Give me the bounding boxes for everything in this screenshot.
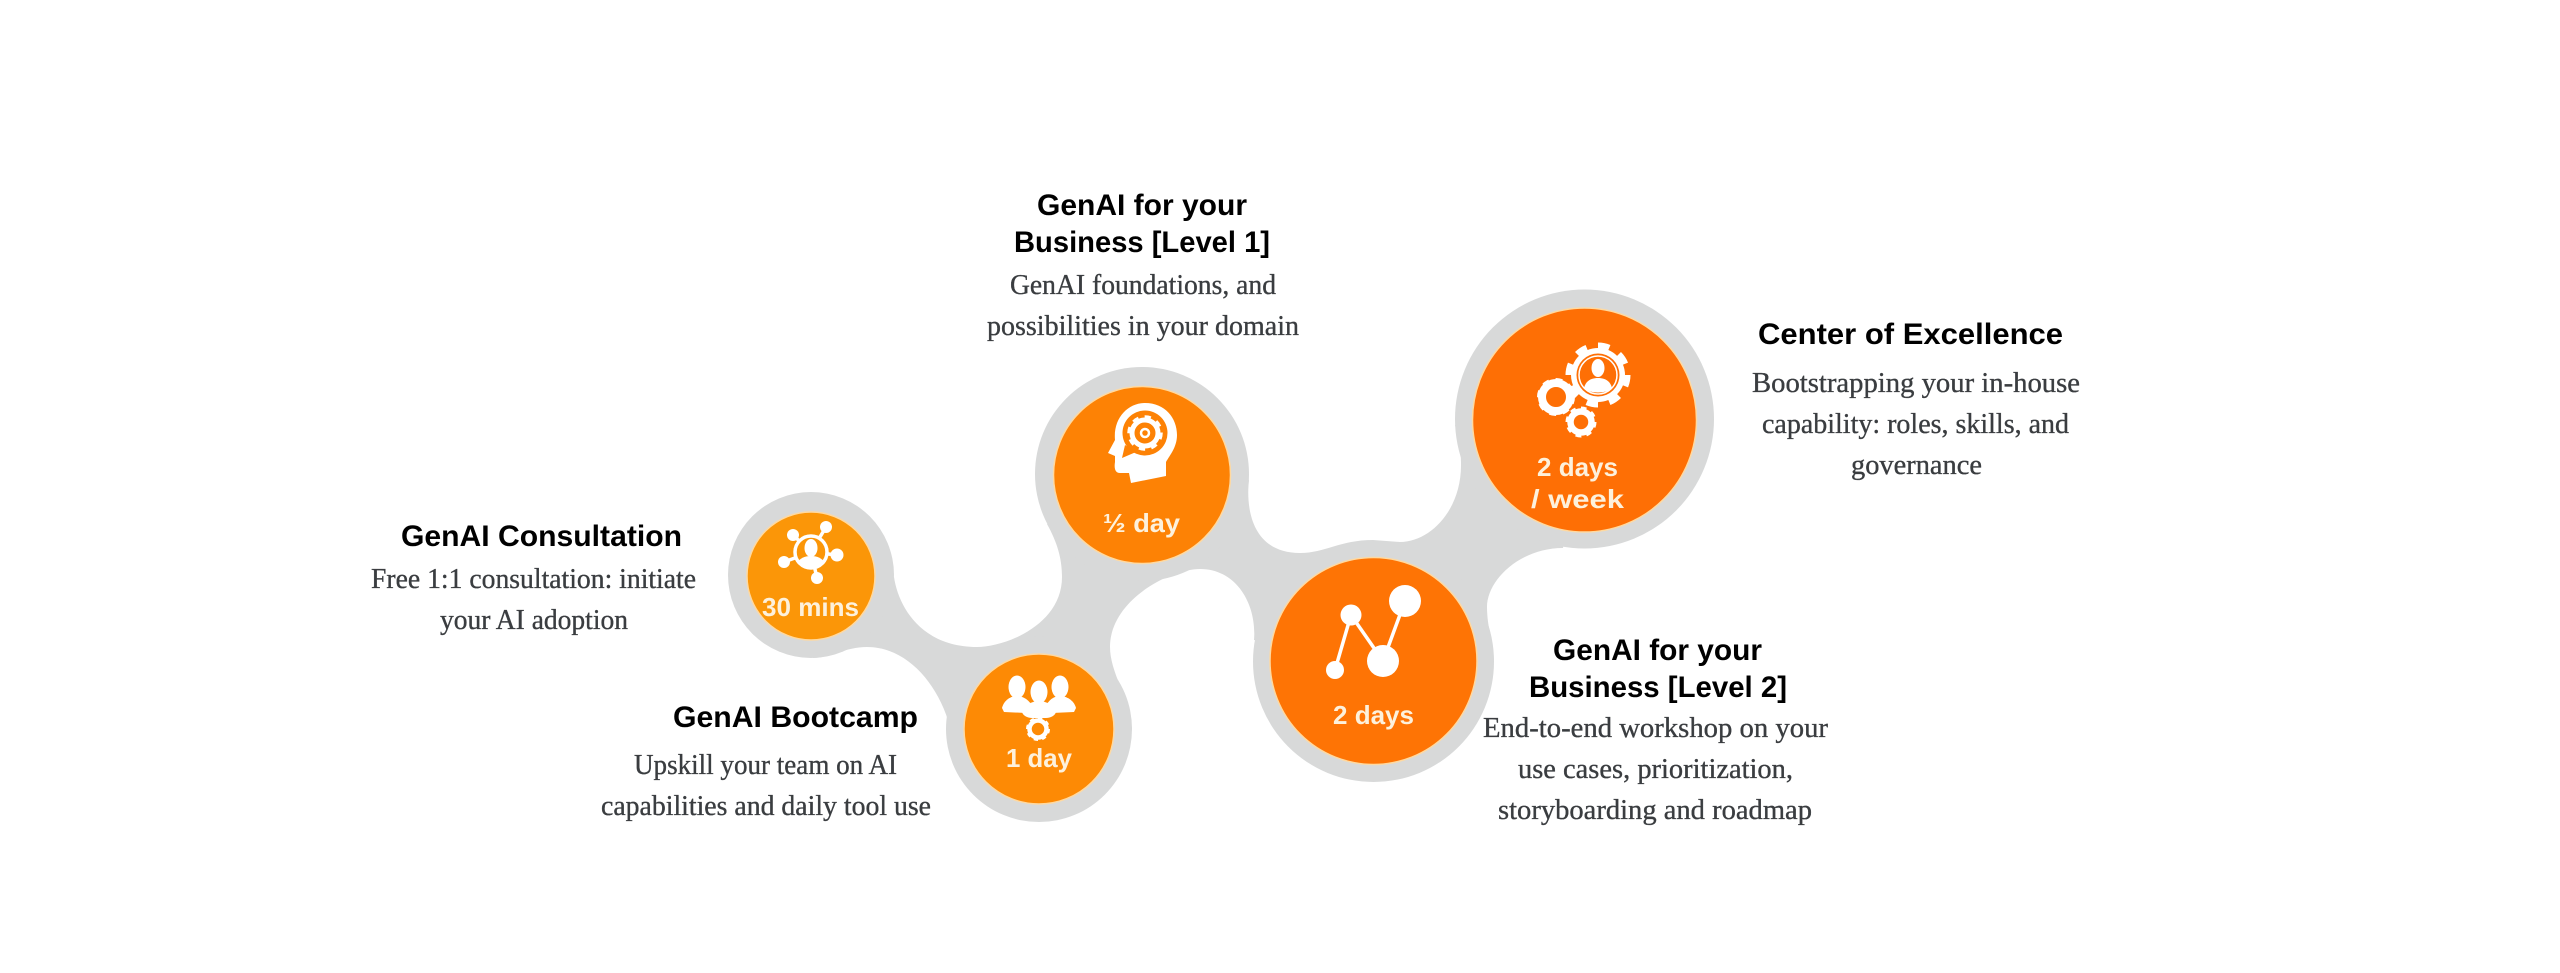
text block: Center of Excellence: capability: roles, skills, and	[1762, 408, 2069, 440]
step 2: 1 day badge	[964, 654, 1114, 804]
text block: GenAI Consultation: your AI adoption	[440, 604, 628, 636]
step 5: 2 days per week badge	[1472, 308, 1696, 532]
step 4: 2 days badge	[1270, 558, 1477, 764]
text block: GenAI for your Business Level 1: GenAI foundations, and	[1010, 269, 1276, 301]
text block: GenAI for your Business Level 1: GenAI for your	[1037, 189, 1247, 222]
grey connecting path	[728, 290, 1714, 822]
text block: GenAI for your Business Level 2: use cases, prioritization,	[1518, 753, 1793, 785]
text block: GenAI for your Business Level 1: possibilities in your domain	[987, 310, 1299, 342]
text block: Center of Excellence: governance	[1851, 449, 1982, 481]
text block: GenAI Consultation: Free 1:1 consultation: initiate	[371, 563, 696, 595]
text block: GenAI Bootcamp: Upskill your team on AI	[634, 749, 897, 781]
icon: head with gear	[1108, 403, 1177, 483]
text block: GenAI for your Business Level 2	[1483, 634, 1828, 826]
step 1: 30 mins badge	[747, 512, 875, 640]
icon: team with gear	[1002, 676, 1076, 739]
label: 2 days / week: 2 days	[1537, 452, 1618, 482]
text block: GenAI for your Business Level 2: storyboarding and roadmap	[1498, 794, 1812, 826]
text block: GenAI for your Business Level 2: Business [Level 2]	[1529, 671, 1787, 704]
text block: GenAI Bootcamp: GenAI Bootcamp	[673, 701, 918, 734]
icon: line chart with nodes	[1326, 585, 1421, 679]
step 3: half day badge	[1054, 386, 1230, 564]
text block: GenAI Bootcamp	[601, 701, 931, 822]
label: 30 mins: 30 mins	[762, 592, 859, 622]
text block: GenAI Consultation: GenAI Consultation	[401, 520, 682, 553]
icon: network person	[778, 521, 844, 584]
text block: Center of Excellence: Bootstrapping your in-house	[1752, 367, 2080, 399]
label: 1 day: 1 day	[1006, 743, 1073, 773]
text block: GenAI Bootcamp: capabilities and daily tool use	[601, 790, 931, 822]
icon: gears with person	[1540, 347, 1626, 435]
text block: GenAI Consultation	[371, 520, 696, 636]
label: 2 days / week: / week	[1531, 484, 1625, 514]
text block: Center of Excellence: Center of Excellence	[1758, 318, 2063, 351]
label: half day: ½ day	[1103, 508, 1181, 538]
text block: GenAI for your Business Level 1: Business [Level 1]	[1014, 226, 1270, 259]
label: 2 days / week	[1531, 452, 1625, 514]
label: 2 days: 2 days	[1333, 700, 1414, 730]
text block: Center of Excellence	[1752, 318, 2080, 481]
text block: GenAI for your Business Level 1	[987, 189, 1299, 342]
text block: GenAI for your Business Level 2: End-to-end workshop on your	[1483, 712, 1828, 744]
text block: GenAI for your Business Level 2: GenAI for your	[1553, 634, 1762, 667]
